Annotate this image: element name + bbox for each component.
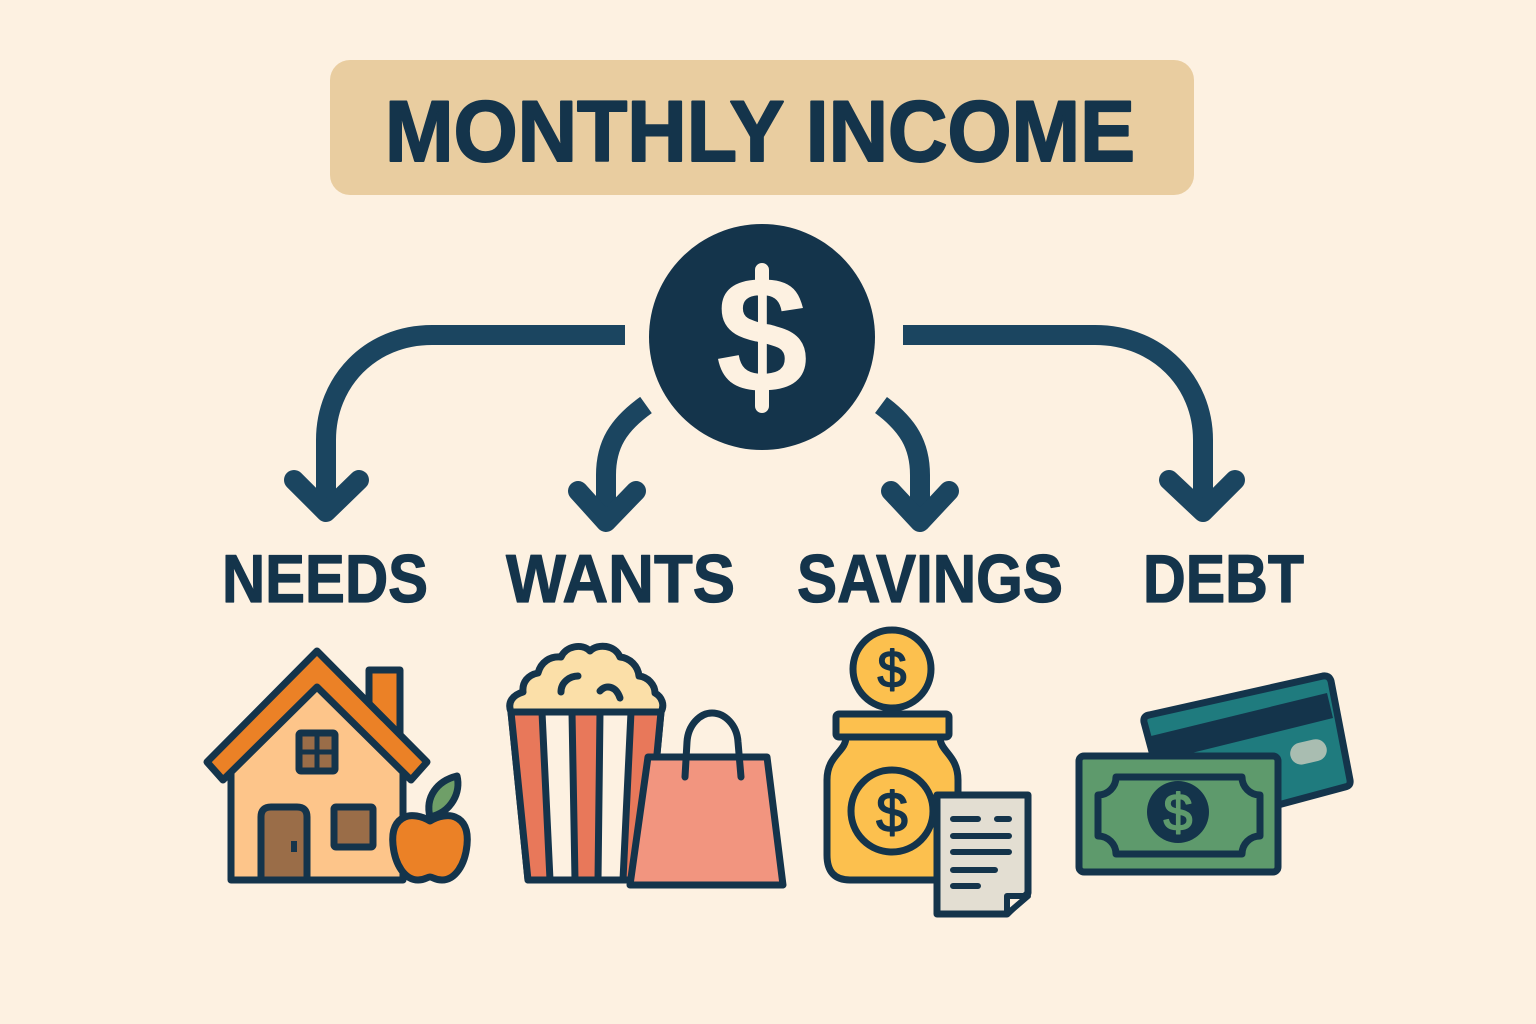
arrow: to wants — [578, 405, 646, 522]
icon: jar coin: $ — [876, 781, 908, 845]
label: savings: SAVINGS — [797, 541, 1063, 617]
icon: popcorn and shopping bag — [510, 646, 783, 885]
arrow: to savings — [881, 405, 949, 522]
title banner — [330, 60, 1194, 195]
icon: receipt — [937, 795, 1028, 914]
arrow: to needs — [294, 335, 625, 512]
icon: banknote — [1079, 756, 1278, 872]
icon: top coin: $ — [878, 641, 907, 699]
arrow: to debt — [903, 335, 1235, 512]
icon: banknote: $ — [1164, 784, 1193, 842]
label: debt: DEBT — [1143, 541, 1304, 617]
label: wants: WANTS — [506, 541, 735, 617]
icon: credit card — [1144, 676, 1350, 805]
label: needs: NEEDS — [222, 541, 428, 617]
icon: apple — [393, 776, 467, 880]
central dollar circle: $ — [716, 243, 808, 428]
icon: shopping bag — [630, 713, 783, 885]
central dollar circle — [649, 224, 875, 450]
title text: MONTHLY INCOME — [385, 84, 1135, 180]
icon: jar coin — [851, 770, 933, 852]
icon: credit card and banknote — [1079, 676, 1350, 872]
icon: savings jar with coin and receipt — [827, 630, 1028, 914]
icon: house with apple — [207, 651, 467, 880]
icon: top coin — [853, 630, 931, 708]
